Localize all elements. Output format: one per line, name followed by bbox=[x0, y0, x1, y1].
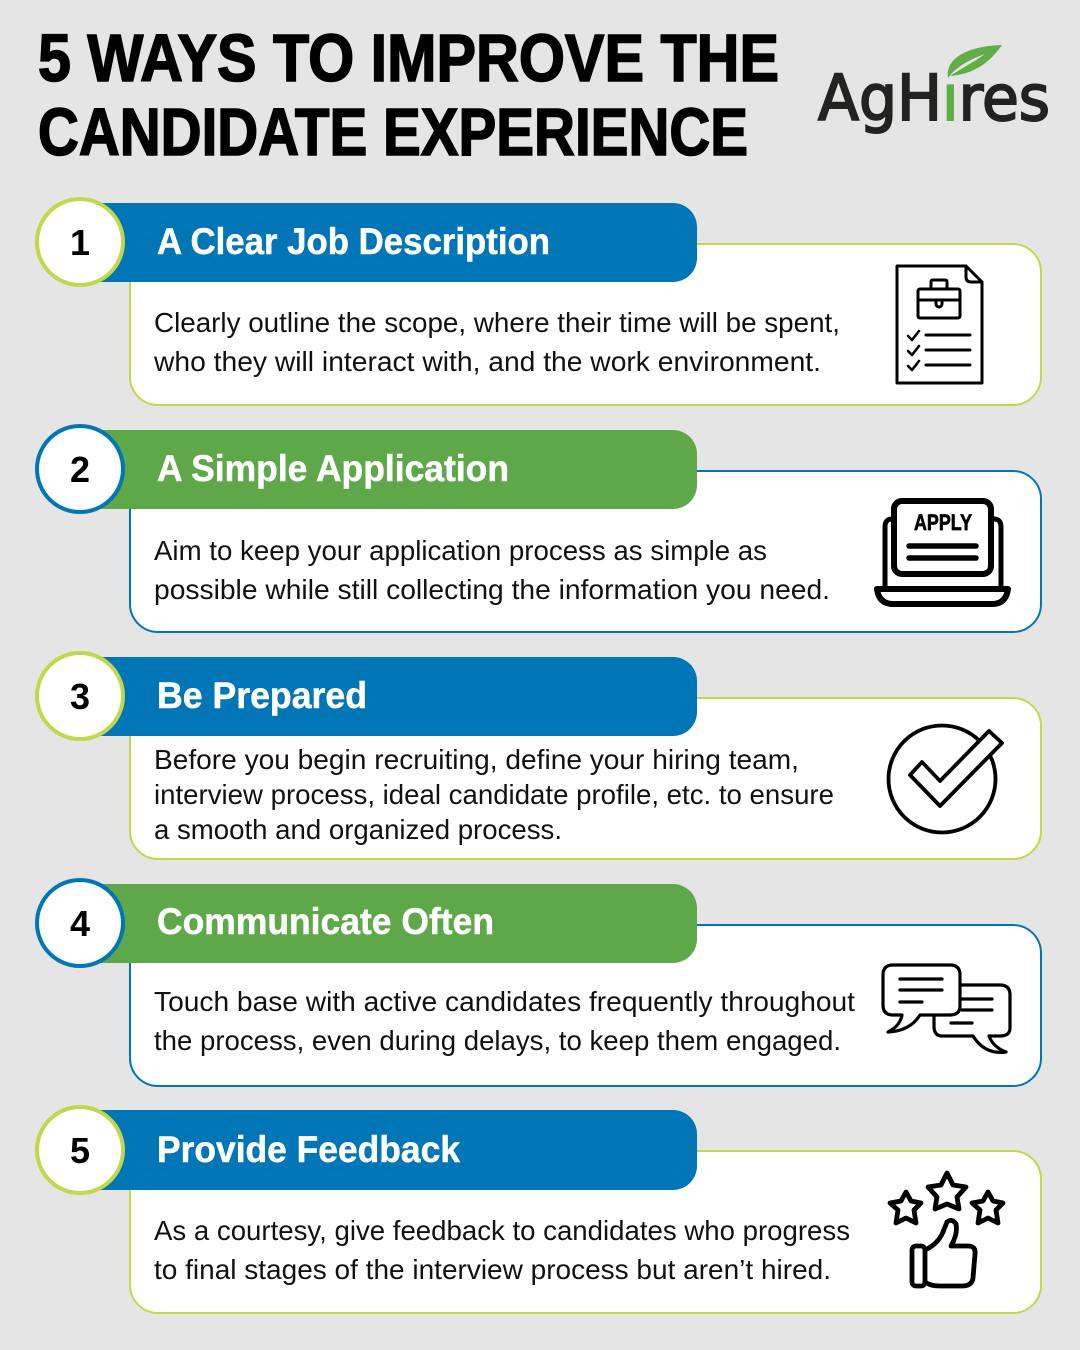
card 1 bbox=[130, 244, 1041, 405]
body text 3 bbox=[154, 744, 834, 845]
card 4 bbox=[130, 925, 1041, 1086]
number badge 3 bbox=[37, 653, 123, 739]
icon: check mark circle bbox=[888, 726, 1002, 832]
body text 4: the process, even during delays, to keep them engaged. bbox=[154, 1025, 841, 1056]
title: 5 WAYS TO IMPROVE THE bbox=[38, 21, 779, 96]
body text 5: to final stages of the interview process but aren’t hired. bbox=[154, 1254, 831, 1285]
body text 2: possible while still collecting the information you need. bbox=[154, 574, 830, 605]
number badge 3: 3 bbox=[70, 676, 90, 717]
number badge 4 bbox=[37, 880, 123, 966]
number badge 5 bbox=[37, 1107, 123, 1193]
number badge 2 bbox=[37, 426, 123, 512]
body text 2: Aim to keep your application process as simple as bbox=[154, 535, 767, 566]
number badge 1: 1 bbox=[70, 222, 90, 263]
icon: chat bubbles bbox=[883, 965, 1010, 1052]
title bbox=[38, 21, 779, 170]
heading 5: Provide Feedback bbox=[157, 1129, 460, 1170]
panel: step 5 bbox=[37, 1107, 1041, 1313]
banner 2 bbox=[100, 430, 697, 509]
body text 5 bbox=[154, 1215, 850, 1285]
body text 2 bbox=[154, 535, 830, 605]
panel: step 1 bbox=[37, 199, 1041, 405]
logo: AgHires: AgHıres bbox=[818, 62, 1050, 135]
banner 4 bbox=[100, 884, 697, 963]
body text 4 bbox=[154, 986, 855, 1056]
banner 5 bbox=[100, 1110, 697, 1190]
body text 4: Touch base with active candidates frequently throughout bbox=[154, 986, 855, 1017]
number badge 4: 4 bbox=[70, 903, 90, 944]
body text 5: As a courtesy, give feedback to candidates who progress bbox=[154, 1215, 850, 1246]
card 3 bbox=[130, 698, 1041, 859]
body text 3: interview process, ideal candidate profile, etc. to ensure bbox=[154, 779, 834, 810]
panel: step 2 bbox=[37, 426, 1041, 632]
body text 1: Clearly outline the scope, where their time will be spent, bbox=[154, 307, 840, 338]
heading 1: A Clear Job Description bbox=[157, 221, 550, 262]
body text 1 bbox=[153, 307, 840, 377]
card 2 bbox=[130, 471, 1041, 632]
body text 1: who they will interact with, and the work environment. bbox=[153, 346, 821, 377]
icon: job description document bbox=[897, 266, 982, 383]
banner 1 bbox=[100, 203, 697, 282]
heading 2: A Simple Application bbox=[157, 448, 509, 489]
heading 4: Communicate Often bbox=[157, 901, 494, 942]
title: CANDIDATE EXPERIENCE bbox=[38, 95, 748, 170]
body text 3: a smooth and organized process. bbox=[154, 814, 562, 845]
icon: laptop apply: APPLY bbox=[914, 510, 972, 535]
icon: laptop apply bbox=[877, 501, 1008, 604]
icon: stars and thumbs up bbox=[890, 1173, 1003, 1286]
number badge 1 bbox=[37, 199, 123, 285]
body text 3: Before you begin recruiting, define your hiring team, bbox=[154, 744, 799, 775]
number badge 5: 5 bbox=[70, 1130, 90, 1171]
banner 3 bbox=[100, 657, 697, 736]
panel: step 3 bbox=[37, 653, 1041, 859]
heading 3: Be Prepared bbox=[157, 675, 367, 716]
number badge 2: 2 bbox=[70, 449, 90, 490]
panel: step 4 bbox=[37, 880, 1041, 1086]
card 5 bbox=[130, 1151, 1041, 1313]
